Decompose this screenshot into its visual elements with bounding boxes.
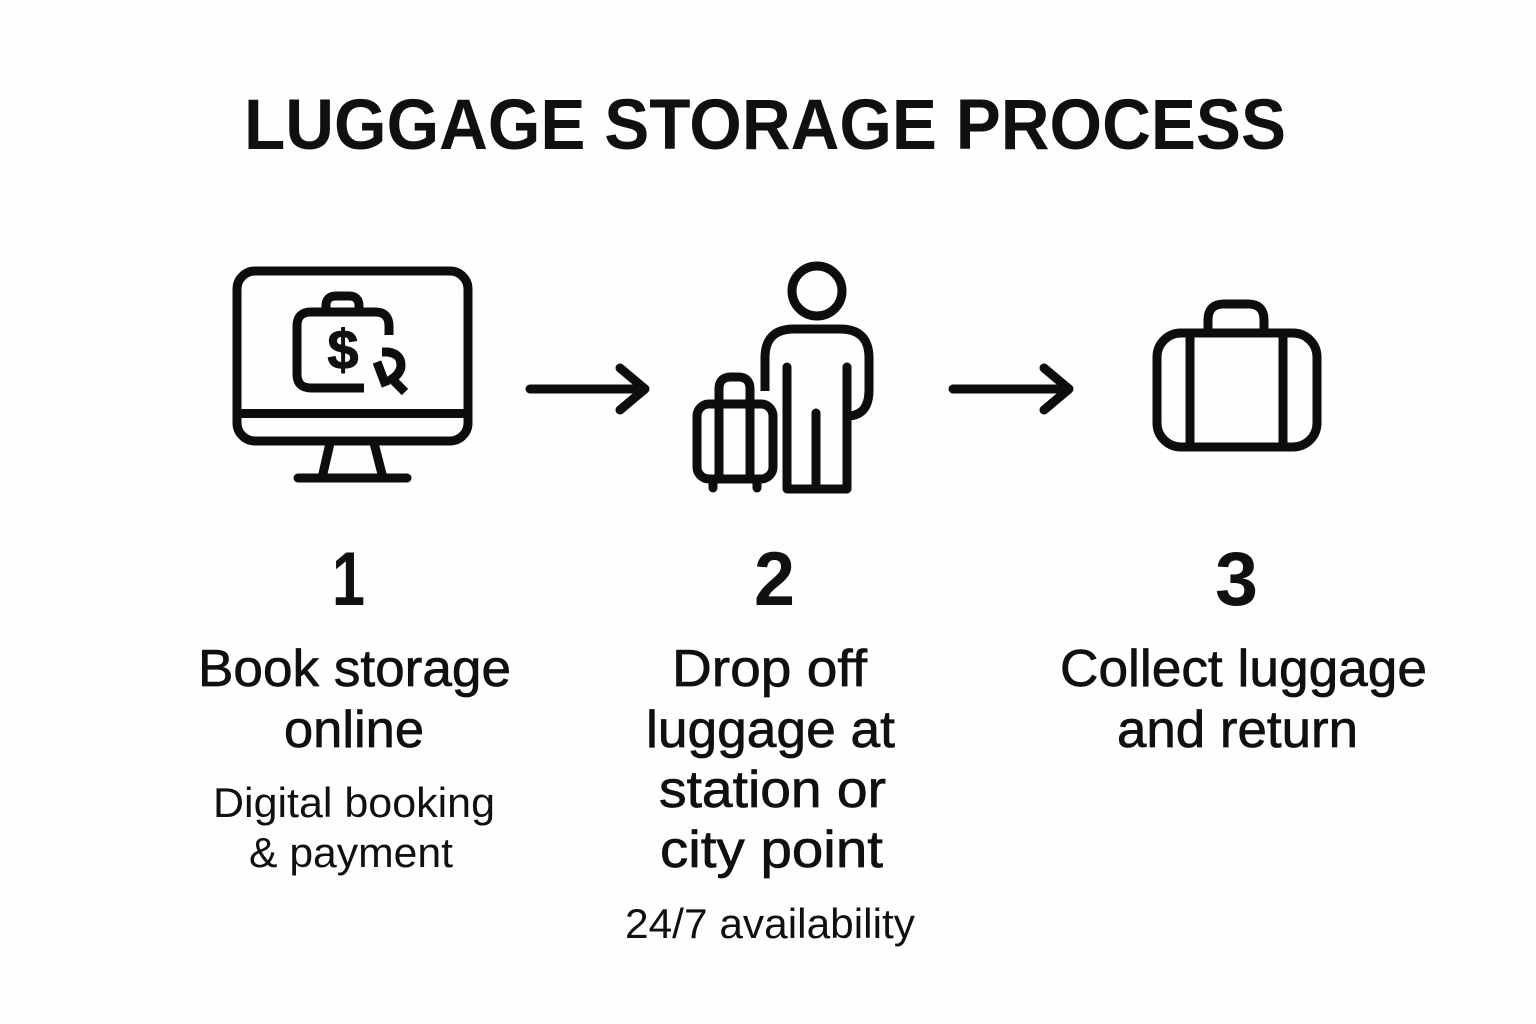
step heading 2 bbox=[646, 640, 896, 879]
step 2: drop off bbox=[625, 266, 915, 947]
step note 1: & payment bbox=[249, 829, 453, 876]
step number 3: 3 bbox=[1215, 537, 1258, 622]
step 1: book online bbox=[198, 271, 511, 876]
step note 1 bbox=[213, 779, 495, 876]
step heading 2: luggage at bbox=[646, 701, 896, 759]
step heading 2: Drop off bbox=[672, 640, 868, 698]
step heading 3 bbox=[1060, 640, 1427, 759]
step heading 3: and return bbox=[1117, 701, 1358, 759]
icon: computer monitor with briefcase payment: $ bbox=[327, 318, 359, 381]
icon: computer monitor with briefcase payment bbox=[237, 271, 468, 478]
arrow: step 1 to step 2 bbox=[530, 368, 645, 410]
step heading 1 bbox=[198, 640, 511, 759]
step 3: collect bbox=[1060, 304, 1427, 759]
icon: suitcase bbox=[1157, 304, 1317, 447]
icon: person with rolling suitcase bbox=[697, 266, 869, 489]
step heading 3: Collect luggage bbox=[1060, 640, 1427, 698]
arrow: step 2 to step 3 bbox=[953, 368, 1069, 410]
step heading 2: city point bbox=[660, 821, 884, 879]
step heading 1: online bbox=[284, 701, 424, 759]
step heading 2: station or bbox=[659, 761, 886, 819]
title: LUGGAGE STORAGE PROCESS bbox=[244, 86, 1286, 165]
step note 2: 24/7 availability bbox=[625, 900, 915, 947]
step number 1: 1 bbox=[332, 537, 365, 622]
step number 2: 2 bbox=[754, 537, 795, 622]
step note 1: Digital booking bbox=[213, 779, 495, 826]
step heading 1: Book storage bbox=[198, 640, 511, 698]
